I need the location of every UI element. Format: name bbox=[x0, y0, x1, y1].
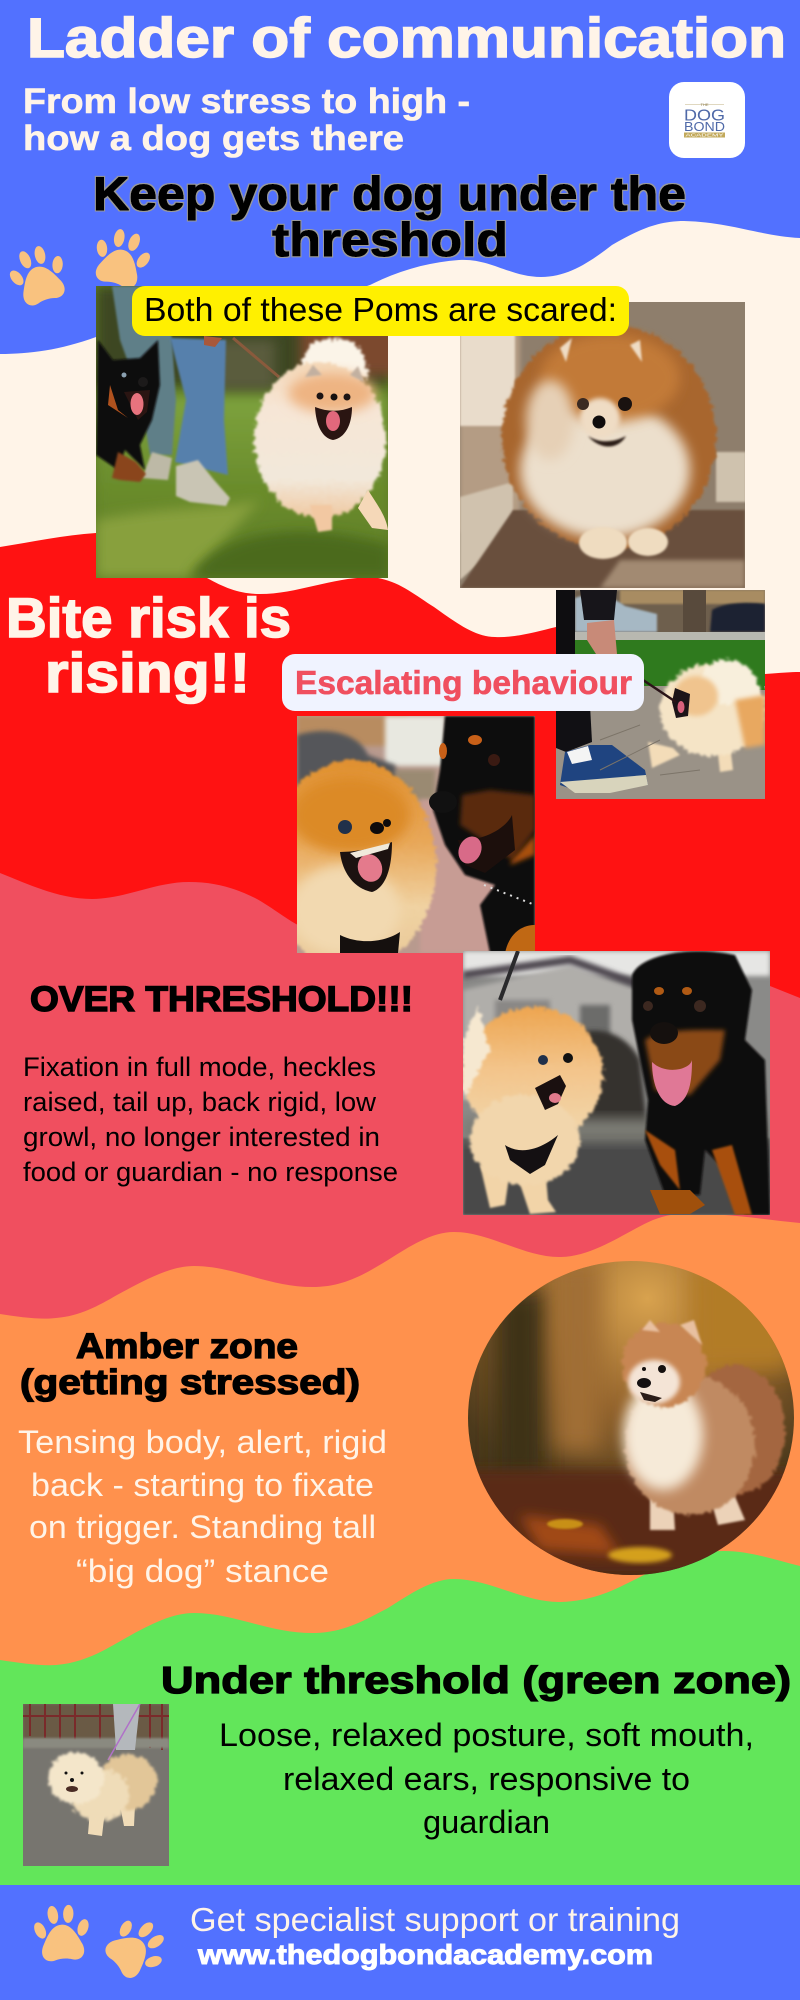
text block: amber zone description: on trigger. Standing tall bbox=[29, 1509, 376, 1545]
subtitle: how a dog gets there bbox=[23, 119, 404, 158]
green zone wave bbox=[0, 1551, 800, 1900]
photo: alert pom in autumn forest bbox=[468, 1261, 794, 1575]
photo: pom and rottweiler on road bbox=[463, 951, 770, 1215]
subtitle bbox=[23, 82, 470, 158]
heading: amber zone: Amber zone bbox=[76, 1327, 298, 1366]
coral zone wave bbox=[0, 873, 800, 1400]
heading: bite risk is rising: rising!! bbox=[45, 641, 250, 704]
icon: paw left bbox=[2, 239, 75, 310]
photo: relaxed pom on tarmac bbox=[23, 1704, 169, 1866]
blue header wave bbox=[0, 0, 800, 354]
footer band bbox=[0, 1885, 800, 2000]
heading: bite risk is rising: Bite risk is bbox=[6, 586, 291, 649]
icon: footer paw right bbox=[97, 1907, 177, 1988]
text block: over threshold description: food or guardian - no response bbox=[23, 1157, 398, 1187]
heading: bite risk is rising bbox=[6, 586, 291, 704]
text block: amber zone description bbox=[18, 1424, 387, 1589]
footer call to action: Get specialist support or training bbox=[190, 1901, 680, 1938]
text block: green zone description: Loose, relaxed posture, soft mouth, bbox=[219, 1717, 754, 1753]
title: Ladder of communication bbox=[27, 6, 786, 69]
icon: paw right bbox=[86, 223, 158, 293]
text block: over threshold description: Fixation in full mode, heckles bbox=[23, 1052, 376, 1082]
heading: keep your dog under the threshold: Keep your dog under the bbox=[93, 167, 686, 220]
label: both poms are scared bbox=[132, 286, 629, 336]
text block: green zone description: guardian bbox=[423, 1804, 550, 1840]
photo: pom on leash on paving bbox=[556, 590, 765, 799]
label: both poms are scared: Both of these Poms are scared: bbox=[144, 291, 617, 328]
logo badge: ACADEMY bbox=[686, 133, 724, 138]
label: escalating behaviour: Escalating behaviour bbox=[295, 664, 632, 701]
text block: amber zone description: “big dog” stance bbox=[76, 1553, 329, 1589]
icon: footer paw left bbox=[30, 1903, 93, 1962]
logo badge bbox=[669, 82, 745, 158]
text block: amber zone description: Tensing body, alert, rigid bbox=[18, 1424, 387, 1460]
heading: amber zone: (getting stressed) bbox=[20, 1363, 360, 1402]
heading: under threshold: Under threshold (green zone) bbox=[161, 1660, 791, 1702]
subtitle: From low stress to high - bbox=[23, 82, 470, 121]
red zone wave bbox=[0, 533, 800, 1100]
text block: green zone description bbox=[219, 1717, 754, 1840]
photo: pom and black dog on grass bbox=[96, 286, 400, 578]
logo badge: THE bbox=[700, 102, 709, 107]
orange zone wave bbox=[0, 1213, 800, 1700]
logo badge: BOND bbox=[684, 119, 725, 134]
text block: over threshold description: growl, no longer interested in bbox=[23, 1122, 380, 1152]
photo: pom snarling at rottweiler bbox=[297, 716, 535, 953]
text block: over threshold description: raised, tail up, back rigid, low bbox=[23, 1087, 377, 1117]
text block: amber zone description: back - starting to fixate bbox=[31, 1467, 374, 1503]
text block: green zone description: relaxed ears, responsive to bbox=[283, 1761, 690, 1797]
heading: keep your dog under the threshold bbox=[93, 167, 686, 266]
photo: scared pom in corner bbox=[460, 302, 746, 588]
heading: amber zone bbox=[20, 1327, 360, 1402]
text block: over threshold description bbox=[23, 1052, 398, 1187]
label: escalating behaviour bbox=[282, 654, 644, 711]
footer website: www.thedogbondacademy.com bbox=[197, 1939, 653, 1970]
heading: keep your dog under the threshold: threshold bbox=[272, 213, 508, 266]
heading: over threshold: OVER THRESHOLD!!! bbox=[30, 980, 413, 1019]
logo badge: DOG bbox=[684, 108, 725, 124]
